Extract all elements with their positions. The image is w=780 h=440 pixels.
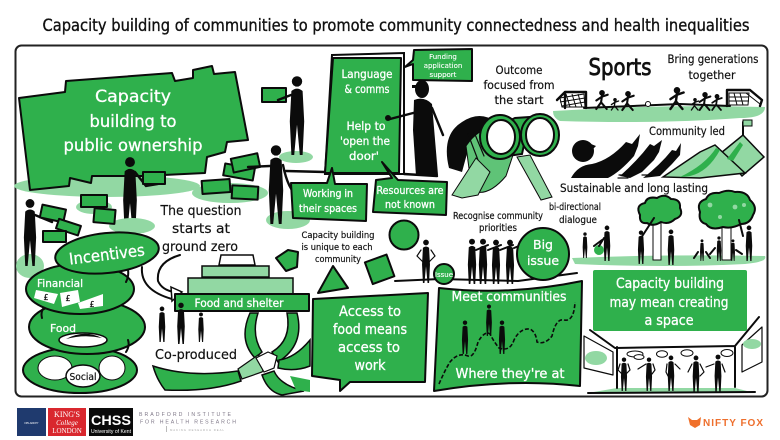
social blob xyxy=(23,347,137,393)
panel: capacity building may mean creating a space: Capacity building xyxy=(616,276,724,292)
pyramid: food and shelter xyxy=(175,255,309,311)
text: outcome focused from the start: Outcome xyxy=(496,63,542,77)
logo: king's college london: KING'S xyxy=(54,410,80,419)
bubble: access to food means access to work: work xyxy=(354,358,386,374)
text: the question starts at ground zero: The question xyxy=(160,204,242,219)
panel: door, language and comms: door' xyxy=(349,149,379,163)
financial blob: £ xyxy=(43,293,49,302)
ribbons and joined hands xyxy=(153,313,310,395)
icon: mountains with path and flag xyxy=(663,120,764,178)
icon: coach silhouette and pointing arms xyxy=(571,134,681,178)
left figure and blocks xyxy=(16,195,155,278)
text: recognise community priorities: priorities xyxy=(479,223,517,234)
circle: big issue: Big xyxy=(533,237,553,252)
panel: capacity building to public ownership: Capacity xyxy=(95,87,171,107)
text: bring generations together: Bring generations xyxy=(668,52,759,66)
text: capacity building is unique: Capacity building xyxy=(302,231,374,241)
food blob xyxy=(29,300,145,354)
panel: door, language and comms: Help to xyxy=(346,119,386,133)
logo: nifty fox: NIFTY FOX xyxy=(703,418,763,429)
logo: king's college london xyxy=(48,408,86,436)
financial blob: £ xyxy=(89,300,95,309)
trees and people on grass xyxy=(572,191,765,266)
bubble: access to food means access to work xyxy=(312,293,428,391)
food blob: Food xyxy=(50,322,76,335)
text: outcome focused from the start: focused from xyxy=(484,78,554,92)
circle: big issue xyxy=(517,228,569,280)
text: recognise community priorities xyxy=(453,211,543,234)
text: outcome focused from the start xyxy=(484,63,554,107)
shapes: pentagon, circle, square, triangle xyxy=(276,220,418,293)
panel: capacity building may mean creating a space: may mean creating xyxy=(610,295,728,311)
figure opening the door xyxy=(385,80,443,176)
logo: bradford institute for health research xyxy=(139,412,236,432)
incentives ellipse xyxy=(53,228,161,278)
bubble: working in their spaces: their spaces xyxy=(299,202,357,215)
panel: capacity building to public ownership xyxy=(14,66,248,197)
panel: capacity building may mean creating a space xyxy=(593,270,747,331)
text: capacity building is unique: community xyxy=(315,255,362,265)
issue circle xyxy=(434,264,454,284)
bubble: funding application support: Funding xyxy=(429,53,457,61)
panel: meet communities where they're at: Meet communities xyxy=(452,289,566,305)
logo: bradford institute for health research: BRADFORD INSTITUTE xyxy=(139,412,232,418)
text: co-produced: Co-produced xyxy=(155,347,237,363)
text: community led: Community led xyxy=(649,124,725,138)
bubble: resources are not known: Resources are xyxy=(376,184,444,197)
logo: delancey xyxy=(17,408,46,436)
text: recognise community priorities: Recognise community xyxy=(453,211,543,222)
logo: king's college london: College xyxy=(56,419,78,427)
logo: king's college london: LONDON xyxy=(52,427,82,435)
bubble: funding application support: application xyxy=(424,62,462,70)
pyramid: food and shelter: Food and shelter xyxy=(194,296,284,310)
incentives stack xyxy=(23,228,161,393)
builder figures carrying green blocks xyxy=(123,76,313,232)
panel: capacity building to public ownership: public ownership xyxy=(64,136,202,156)
logo: chss university of kent: CHSS xyxy=(91,412,131,428)
room with figures and thought bubbles xyxy=(584,317,762,393)
text: capacity building is unique: is unique to each xyxy=(302,243,372,253)
financial blob: £ xyxy=(65,294,71,303)
text: sustainable and long lasting: Sustainable and long lasting xyxy=(560,181,708,195)
main frame xyxy=(16,46,768,396)
panel: capacity building to public ownership: building to xyxy=(90,112,176,132)
text: bi-directional dialogue: dialogue xyxy=(559,215,597,226)
panel: capacity building may mean creating a space: a space xyxy=(644,313,694,329)
text: bi-directional dialogue: bi-directional xyxy=(549,202,601,213)
text: bring generations together: together xyxy=(688,68,736,82)
bubble: access to food means access to work: access to xyxy=(338,340,400,356)
text: capacity building is unique xyxy=(302,231,374,265)
text: the question starts at ground zero xyxy=(160,204,242,255)
sports field with goals and players xyxy=(553,87,765,122)
logo: bradford institute for health research: MAKING RESEARCH REAL xyxy=(170,428,224,432)
incentives ellipse: Incentives xyxy=(68,240,146,269)
icon: figure looking through binoculars xyxy=(447,114,559,200)
bubble: access to food means access to work: food means xyxy=(333,322,407,338)
financial blob xyxy=(26,264,134,314)
ground line, figures and issues xyxy=(395,239,577,284)
bubble: funding application support xyxy=(405,49,472,81)
social blob: Social xyxy=(70,372,96,383)
logo: delancey: DELANCEY xyxy=(25,421,39,425)
text: the question starts at ground zero: ground zero xyxy=(162,240,238,255)
text: bring generations together xyxy=(668,52,759,82)
panel: door, language and comms: & comms xyxy=(344,82,390,96)
bubble: access to food means access to work: Access to xyxy=(339,304,401,320)
text: the question starts at ground zero: starts at xyxy=(172,222,230,237)
logo: bradford institute for health research: FOR HEALTH RESEARCH xyxy=(140,420,236,426)
financial blob: Financial xyxy=(37,277,83,290)
panel: door, language and comms: Language xyxy=(342,67,392,81)
issue circle: Issue xyxy=(435,271,453,279)
bubble: resources are not known: not known xyxy=(385,198,435,211)
panel: door, language and comms: 'open the xyxy=(340,134,390,148)
bubble: resources are not known xyxy=(373,162,447,215)
bubble: working in their spaces xyxy=(291,168,367,221)
people under pyramid xyxy=(159,303,204,344)
heading: sports: Sports xyxy=(588,55,652,81)
panel: door, language and comms xyxy=(286,53,437,176)
panel: meet communities where they're at xyxy=(434,281,582,391)
logo: chss university of kent xyxy=(89,408,133,436)
text: bi-directional dialogue xyxy=(549,202,601,226)
logo: chss university of kent: University of Kent xyxy=(91,429,132,435)
arrows into pyramid xyxy=(142,255,182,301)
panel: meet communities where they're at: Where they're at xyxy=(456,366,564,382)
text: outcome focused from the start: the start xyxy=(494,93,544,107)
bubble: funding application support: support xyxy=(430,71,457,79)
bubble: working in their spaces: Working in xyxy=(303,187,353,200)
circle: big issue: issue xyxy=(527,253,559,268)
